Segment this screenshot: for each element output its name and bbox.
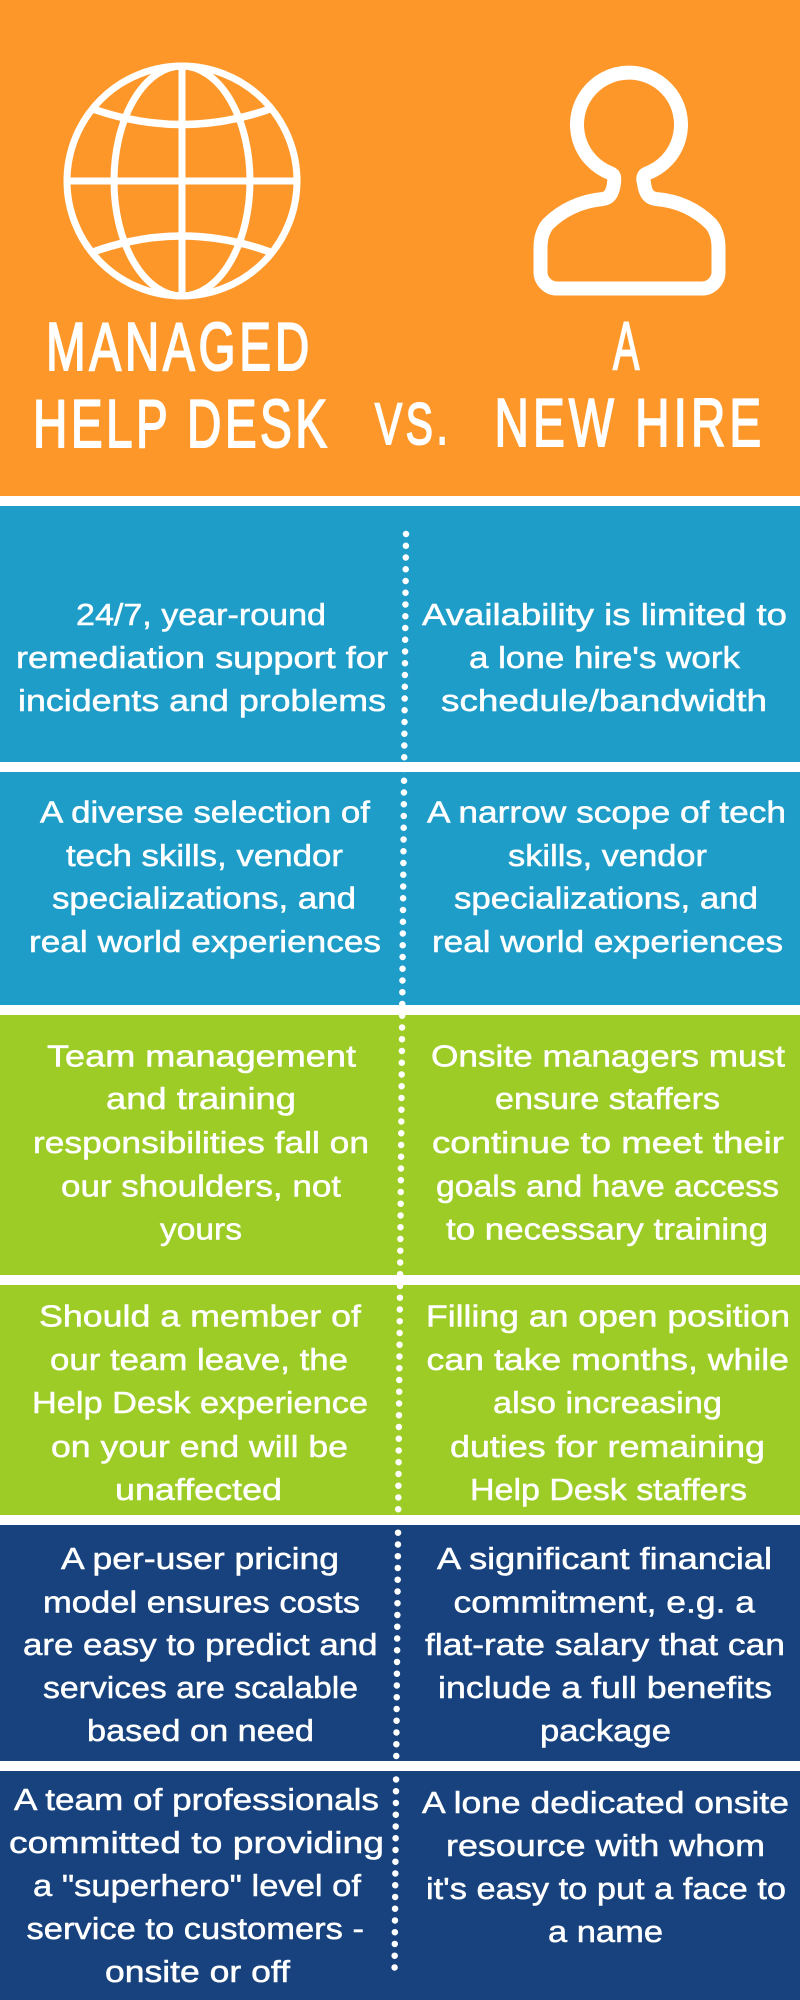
icon: globe xyxy=(67,66,297,296)
text: new hire staffing: Filling an open position xyxy=(426,1300,790,1334)
text: managed help desk availability: 24/7, year-round xyxy=(76,598,326,632)
panel: row 1 availability xyxy=(0,506,800,762)
text: managed help desk pricing: services are scalable xyxy=(43,1671,358,1705)
heading: A New Hire: A xyxy=(613,308,639,384)
panel: row 2 skills xyxy=(0,772,800,1005)
text: managed help desk pricing: A per-user pricing xyxy=(61,1542,339,1576)
text: new hire staffing: duties for remaining xyxy=(450,1430,765,1464)
text: managed help desk pricing: are easy to predict and xyxy=(23,1628,378,1662)
text: managed help desk availability xyxy=(16,598,388,718)
text: managed help desk skills xyxy=(29,796,381,959)
text: managed help desk service xyxy=(9,1783,384,1989)
text: managed help desk pricing: model ensures costs xyxy=(43,1586,360,1620)
text: managed help desk service: committed to providing xyxy=(9,1826,384,1860)
text: new hire skills: specializations, and xyxy=(454,882,758,916)
text: new hire management: continue to meet their xyxy=(432,1126,784,1160)
text: new hire service: a name xyxy=(548,1915,663,1949)
text: managed help desk management: Team management xyxy=(47,1040,357,1074)
panel: row 5 pricing xyxy=(0,1525,800,1761)
text: new hire service: A lone dedicated onsite xyxy=(422,1786,789,1820)
text: managed help desk management: yours xyxy=(160,1212,242,1246)
heading: vs.: VS. xyxy=(375,392,448,457)
text: new hire staffing: can take months, while xyxy=(426,1343,789,1377)
text: managed help desk service: A team of professionals xyxy=(14,1783,379,1817)
panel: header xyxy=(0,0,800,496)
heading: Managed Help Desk: MANAGED xyxy=(46,310,309,385)
text: managed help desk pricing: based on need xyxy=(87,1714,314,1748)
text: managed help desk pricing xyxy=(23,1542,378,1748)
text: managed help desk management: responsibilities fall on xyxy=(33,1126,369,1160)
text: new hire management: ensure staffers xyxy=(495,1082,720,1116)
icon: person xyxy=(540,73,718,288)
text: new hire management: Onsite managers must xyxy=(431,1040,786,1074)
panel: row 4 staffing xyxy=(0,1285,800,1515)
text: managed help desk staffing: Should a member of xyxy=(39,1300,362,1334)
text: new hire management: goals and have access xyxy=(436,1170,779,1204)
text: managed help desk staffing: Help Desk experience xyxy=(32,1386,368,1420)
panel: row 6 service xyxy=(0,1771,800,2000)
text: managed help desk availability: incidents and problems xyxy=(18,684,386,718)
text: new hire availability: a lone hire's work xyxy=(469,641,741,675)
text: new hire skills: A narrow scope of tech xyxy=(427,796,786,830)
text: managed help desk skills: specializations, and xyxy=(52,882,356,916)
text: managed help desk availability: remediation support for xyxy=(16,641,388,675)
text: new hire pricing: include a full benefits xyxy=(438,1671,772,1705)
text: new hire service xyxy=(422,1786,789,1949)
heading: Managed Help Desk xyxy=(33,310,327,462)
text: new hire pricing: A significant financial xyxy=(437,1542,772,1576)
text: new hire availability: Availability is limited to xyxy=(422,598,787,632)
text: managed help desk service: service to customers - xyxy=(26,1912,364,1946)
heading: Managed Help Desk: HELP DESK xyxy=(33,387,327,462)
text: new hire skills: real world experiences xyxy=(432,925,783,959)
text: new hire pricing xyxy=(425,1542,785,1748)
text: new hire availability: schedule/bandwidth xyxy=(441,684,767,718)
text: new hire pricing: commitment, e.g. a xyxy=(454,1586,755,1620)
heading: A New Hire xyxy=(494,308,761,461)
text: managed help desk staffing: our team leave, the xyxy=(50,1343,348,1377)
text: new hire management: to necessary training xyxy=(446,1212,768,1246)
text: new hire skills xyxy=(427,796,786,959)
text: new hire pricing: flat-rate salary that can xyxy=(425,1628,785,1662)
text: managed help desk staffing: on your end will be xyxy=(51,1430,348,1464)
text: new hire service: it's easy to put a face to xyxy=(426,1872,786,1906)
text: managed help desk service: a "superhero" level of xyxy=(33,1869,362,1903)
text: managed help desk management: our shoulders, not xyxy=(61,1170,342,1204)
dotted divider xyxy=(394,534,406,1978)
text: new hire pricing: package xyxy=(540,1714,671,1748)
heading: A New Hire: NEW HIRE xyxy=(494,386,761,461)
text: managed help desk skills: real world experiences xyxy=(29,925,381,959)
text: managed help desk service: onsite or off xyxy=(105,1955,291,1989)
text: new hire staffing: also increasing xyxy=(493,1386,722,1420)
text: managed help desk staffing: unaffected xyxy=(115,1473,282,1507)
text: new hire management xyxy=(431,1040,786,1246)
text: managed help desk management: and training xyxy=(106,1082,296,1116)
text: new hire skills: skills, vendor xyxy=(508,839,707,873)
text: new hire staffing xyxy=(426,1300,790,1507)
text: new hire availability xyxy=(422,598,787,718)
text: managed help desk skills: tech skills, vendor xyxy=(66,839,343,873)
panel: row 3 management xyxy=(0,1015,800,1275)
text: managed help desk staffing xyxy=(32,1300,368,1507)
text: managed help desk skills: A diverse selection of xyxy=(40,796,371,830)
text: managed help desk management xyxy=(33,1040,369,1246)
text: new hire service: resource with whom xyxy=(446,1829,765,1863)
text: new hire staffing: Help Desk staffers xyxy=(470,1473,747,1507)
